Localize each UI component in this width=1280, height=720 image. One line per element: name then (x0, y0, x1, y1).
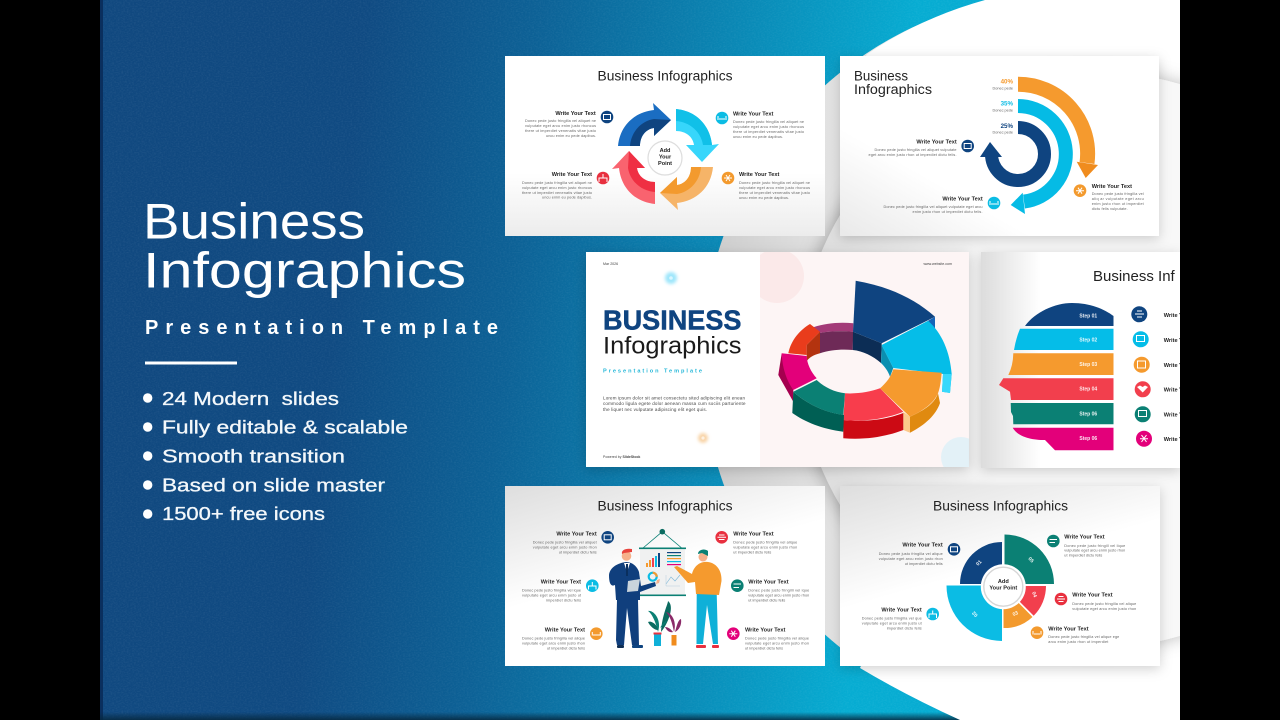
text block bottom left: Write Your Text (881, 608, 922, 614)
text block left 1 (533, 531, 614, 554)
powered by: Powered by SlideStock (603, 455, 640, 459)
text block top left: Donec pede justo fringilla vel aliquet ne (525, 119, 596, 123)
text block top left: uncu enim eu pede dapibus. (546, 134, 596, 138)
segmented pie chart: 01 (975, 559, 984, 567)
text block left 2: imperdiet dictu felis (546, 598, 581, 602)
text block right 2 (731, 579, 809, 602)
step 01 strip (1025, 303, 1114, 326)
panel: slide 2 concentric arrows (840, 56, 1159, 236)
text block top left: there ut imperdiet venenatis vitae justo (525, 129, 596, 133)
panel: slide 4 head steps (981, 252, 1204, 468)
text block right 1: Write Your Text (733, 531, 774, 537)
panel: slide 5 presenters (505, 486, 825, 666)
text block right 3: vulputate eget arcu enim justo rhon (745, 642, 809, 646)
slide 2 heading: Infographics (854, 82, 932, 97)
text block right 2: Donec pede justo fringilli vel ique (748, 589, 809, 593)
step 05 strip (1011, 403, 1114, 424)
text block right 1: ut imperdiet dictu felis (733, 550, 771, 554)
text block top left: Write Your Text (902, 543, 943, 549)
segmented pie chart: 03 (1012, 610, 1020, 618)
feature list (143, 389, 408, 524)
text block right: Write Your Text (1092, 184, 1132, 190)
text block right 2: ut imperdiet dictu felis (748, 598, 785, 602)
text block top right: Write Your Text (733, 112, 773, 118)
text block bottom right: Write Your Text (1048, 627, 1089, 633)
step icons and labels: Write Your Text (1164, 388, 1204, 394)
text block bottom left: Write Your Text (552, 172, 592, 178)
center point: Point (658, 161, 672, 167)
text block left 3: vulputate eget arcu enim justo rhon (522, 642, 585, 646)
segmented pie chart: 05 (1027, 556, 1035, 565)
slide 5 heading: Business Infographics (598, 498, 733, 514)
step 02 strip: Step 02 (1079, 338, 1097, 344)
step icons and labels (1131, 306, 1204, 447)
glow dot orange (698, 433, 708, 443)
text block left: eget arcu enim justo rhon ut imperdiet dictu felis. (868, 153, 956, 157)
text block middle right: vulputate eget arcu enim justo rhon (1072, 607, 1136, 611)
text block bottom (884, 196, 1000, 214)
text block bottom right: Donec pede justo fringilla vel alique ege (1048, 635, 1119, 639)
step 03 strip (1008, 353, 1114, 375)
navy arc arrow (980, 128, 1044, 180)
text block top right: there ut imperdiet venenatis vitae justo (733, 130, 804, 134)
step 01 strip: Step 01 (1079, 314, 1097, 320)
cover paragraph (603, 395, 746, 412)
step 03 strip: Step 03 (1079, 362, 1097, 368)
text block left 3: ut imperdiet dictu felis (547, 647, 585, 651)
step 04 strip: Step 04 (1079, 386, 1097, 392)
feature list: Smooth transition (162, 446, 345, 466)
text block bottom left (522, 172, 609, 200)
text block top left (525, 111, 613, 138)
subtitle: Presentation Template (145, 317, 498, 339)
text block bottom left: vulputate eget arcu enim justo ut (862, 622, 923, 626)
text block left (868, 140, 974, 157)
text block bottom left: imperdiet dictu felis (887, 626, 922, 630)
step 02 strip (1014, 329, 1114, 350)
center point: Add (998, 579, 1009, 585)
date: Mar 2026 (603, 262, 618, 266)
text block top right: uncu enim eu pede dapibus. (733, 135, 783, 139)
text block top right: ut imperdiet dictu felis (1064, 554, 1102, 558)
man in hoodie (674, 550, 722, 648)
3D donut chart (778, 281, 952, 439)
text block bottom: Write Your Text (942, 196, 983, 202)
text block top left: ut imperdiet dictu felis (905, 562, 943, 566)
text block middle right (1055, 593, 1136, 611)
text block bottom left: there ut imperdiet venenatis vitae justo (522, 191, 592, 195)
step 06 strip: Step 06 (1079, 436, 1097, 442)
text block left: Donec pede justo fringilla vel aliquet vulputate (874, 148, 956, 152)
text block left 2 (522, 579, 599, 602)
slide 6 heading: Business Infographics (933, 498, 1068, 514)
feature list: Fully editable & scalable (162, 418, 408, 438)
slide 2 heading (854, 68, 932, 97)
text block top left: vulputate eget arcu enim justo rhon (879, 557, 943, 561)
cycle arrows chart (612, 103, 719, 210)
cyan arc arrow (1011, 106, 1066, 214)
decorative circles (760, 252, 969, 467)
cover paragraph: the liquet nec vulputate adipiscing elit eget quis. (603, 407, 707, 412)
text block right: aliq ar vulputate eget arcu (1092, 197, 1144, 201)
text block right 1 (715, 531, 797, 554)
text block left 2: Donec pede justo fringilla vel ique (522, 589, 581, 593)
slide 4 heading: Business Inf (1093, 268, 1176, 285)
text block right 3: Write Your Text (745, 627, 785, 633)
percentage labels: Donec pede (993, 130, 1013, 134)
segmented pie chart (946, 534, 1054, 641)
panel: slide 1 cycle arrows (505, 56, 825, 236)
step icons and labels: Write Your Text (1164, 412, 1204, 418)
text block top right: Donec pede justo fringill vel lique (1064, 544, 1125, 548)
text block bottom right: uncu enim eu pede dapibus. (739, 196, 789, 200)
text block left: Write Your Text (916, 140, 957, 146)
cover paragraph: commodo ligula egete dolor aenean massa cum sociis parturiente (603, 401, 746, 406)
text block right 3: Donec pede justo fringilla vel alique (745, 637, 809, 641)
step icons and labels: Write Your Text (1164, 313, 1204, 319)
glow dot cyan (665, 272, 677, 284)
text block bottom left: vulputate eget arcu enim justo rhoncus (522, 186, 592, 190)
presentation board (639, 529, 686, 596)
step icons and labels: Write Your Text (1164, 437, 1204, 443)
text block bottom right (722, 172, 810, 200)
text block top right (716, 112, 804, 139)
text block left 1: ut imperdiet dictu felis (559, 550, 597, 554)
text block bottom right (1031, 626, 1119, 644)
text block left 2: vulputate eget arcu enim justo ut (522, 594, 582, 598)
text block top right: Donec pede justo fringilla vel aliquet ne (733, 120, 804, 124)
text block bottom: enim justo rhon ut imperdiet dictu felis. (912, 210, 982, 214)
text block right: dictu felis vulputate. (1092, 207, 1128, 211)
text block bottom right: vulputate eget arcu enim justo rhoncus (739, 186, 810, 190)
text block middle right: Write Your Text (1072, 593, 1113, 599)
text block bottom left: Donec pede justo fringilla vel que (862, 616, 922, 620)
orange arc arrow (1018, 84, 1098, 178)
center point: Add (660, 148, 671, 154)
text block left 2: Write Your Text (541, 579, 581, 585)
center point (981, 564, 1026, 609)
percentage labels: Donec pede (993, 86, 1013, 90)
feature list: 24 Modern slides (162, 389, 339, 409)
text block bottom right: arcu enim justo rhon ut imperdiet (1048, 640, 1109, 644)
text block top left: Donec pede justo fringilla vel alique (879, 552, 943, 556)
step 06 strip (1013, 428, 1114, 450)
percentage labels: 40% (1001, 78, 1013, 86)
divider bar (145, 362, 237, 364)
text block bottom right: Write Your Text (739, 172, 779, 178)
website: www.website.com (923, 262, 952, 266)
panel: slide 3 cover (586, 249, 981, 477)
cover paragraph: Lorem ipsum dolor sit amet consectetu sited adipiscing elit enean (603, 395, 745, 400)
text block left 3 (522, 627, 603, 651)
text block top right: vulputate eget arcu enim justo rhon (1064, 549, 1125, 553)
text block right 2: Write Your Text (748, 579, 789, 585)
step icons and labels: Write Your Text (1164, 363, 1204, 369)
feature list: 1500+ free icons (162, 504, 325, 524)
text block top left: Write Your Text (555, 111, 596, 117)
text block left 1: Donec pede justo fringilla vel aliquet (533, 540, 598, 544)
text block left 1: vulputate eget arcu enim justo rhon (533, 546, 597, 550)
text block right 3 (727, 627, 809, 651)
slide 2 heading: Business (854, 68, 908, 84)
text block top left (879, 543, 960, 566)
panel: slide 6 segmented pie (840, 486, 1160, 666)
percentage labels (993, 78, 1013, 134)
text block top right (1047, 535, 1125, 558)
segmented pie chart: 04 (1030, 591, 1038, 599)
text block right (1074, 184, 1145, 211)
center point (648, 141, 682, 175)
segmented pie chart: 02 (971, 609, 979, 618)
text block top right: vulputate eget arcu enim justo rhoncus (733, 125, 804, 129)
percentage labels: 25% (1001, 123, 1013, 130)
cover heading: BUSINESS (603, 304, 742, 336)
percentage labels: Donec pede (993, 108, 1013, 112)
text block middle right: Donec pede justo fringilla vel alique (1072, 602, 1136, 606)
step icons and labels: Write Your Text (1164, 338, 1204, 344)
center point: Your Point (989, 586, 1017, 592)
step 04 strip (999, 378, 1114, 400)
text block right 1: Donec pede justo fringilla vel alique (733, 540, 797, 544)
text block bottom left: Donec pede justo fringilla vel aliquet ne (522, 181, 592, 185)
text block left 3: Donec pede justo fringilla vel alique (522, 637, 585, 641)
text block bottom left (862, 608, 939, 630)
text block left 3: Write Your Text (545, 627, 585, 633)
text block right 1: vulputate eget arcu enim justo rhon (733, 546, 797, 550)
text block top right: Write Your Text (1064, 535, 1105, 541)
text block bottom right: there ut imperdiet venenatis vitae justo (739, 191, 810, 195)
text block bottom: Donec pede justo fringilla vel aliquet vulputate eget arcu (884, 205, 982, 209)
text block left 1: Write Your Text (556, 531, 597, 537)
feature list: Based on slide master (162, 476, 385, 496)
cover tagline: Presentation Template (603, 369, 702, 375)
text block right: enim justo rhon ut imperdiet (1092, 202, 1145, 206)
text block right 3: ut imperdiet dictu felis (745, 647, 783, 651)
center point: Your (659, 154, 672, 160)
slide 1 heading: Business Infographics (598, 68, 733, 84)
percentage labels: 35% (1001, 100, 1013, 108)
text block right: Donec pede justo fringilla vel (1092, 192, 1144, 196)
man in suit (609, 549, 660, 648)
main title: Business (143, 194, 365, 250)
step 05 strip: Step 06 (1079, 412, 1097, 418)
cover subheading: Infographics (603, 332, 742, 360)
text block bottom right: Donec pede justo fringilla vel aliquet ne (739, 181, 810, 185)
potted plants (648, 601, 681, 646)
text block bottom left: uncu enim eu pede dapibus. (542, 196, 592, 200)
text block right 2: vulputate eget arcu enim justo rhon (748, 594, 809, 598)
text block top left: vulputate eget arcu enim justo rhoncus (525, 124, 596, 128)
main title (143, 194, 466, 298)
main title: Infographics (143, 242, 466, 298)
